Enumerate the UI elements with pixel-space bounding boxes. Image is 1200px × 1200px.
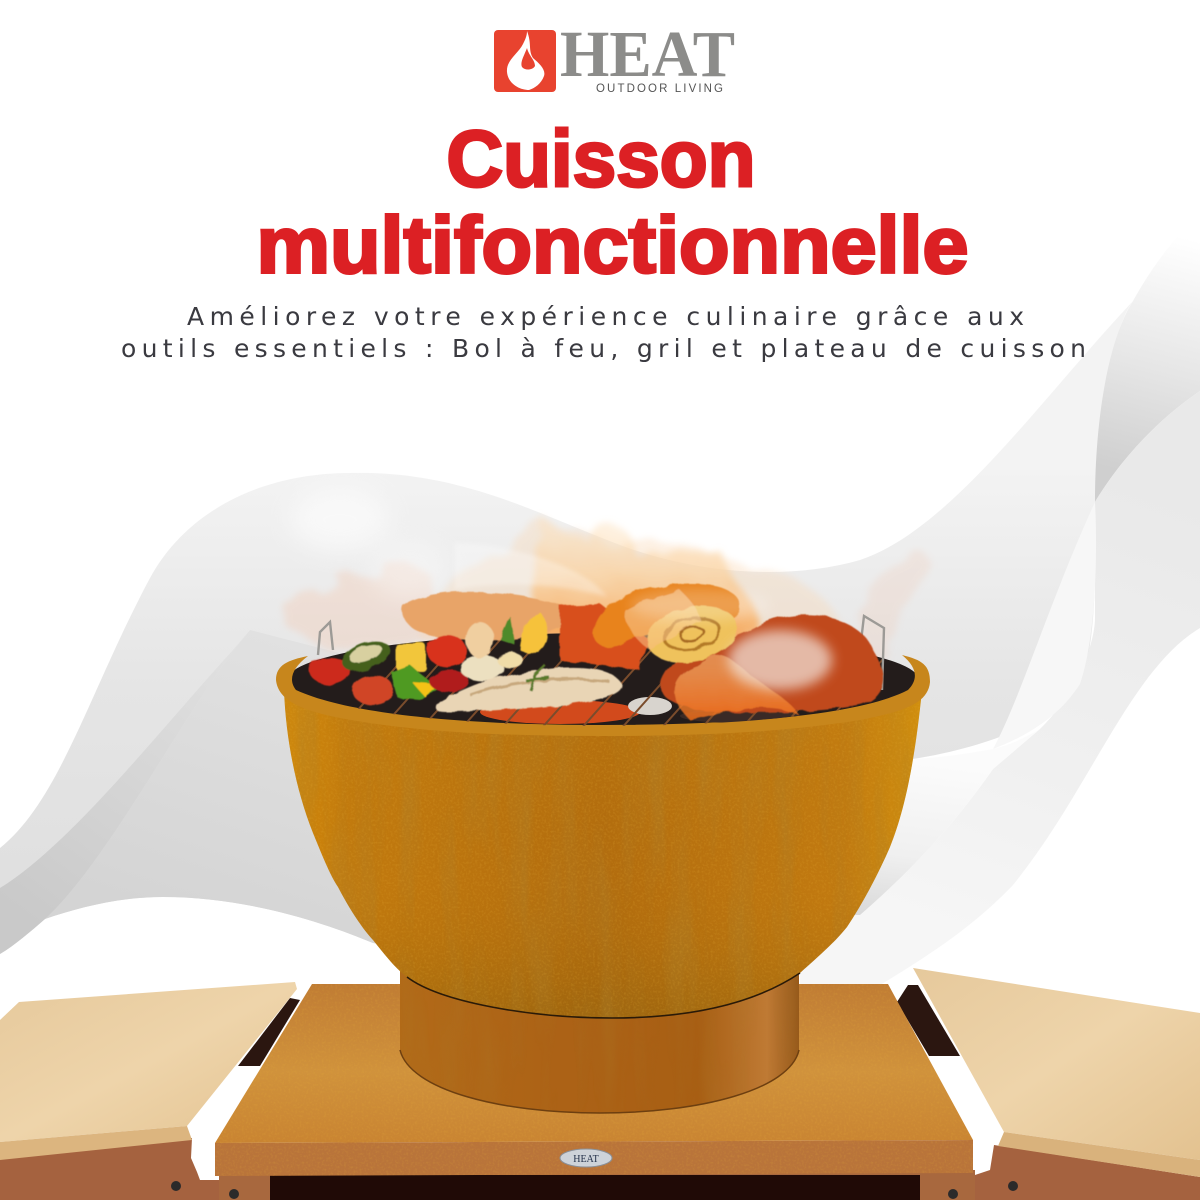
chicken breast	[435, 667, 622, 712]
coals and embers	[480, 697, 800, 724]
fire bowl	[276, 633, 930, 1020]
left shelf top	[0, 982, 297, 1142]
background swoosh	[0, 215, 1200, 985]
right shelf top	[913, 968, 1200, 1160]
vegetable skewers	[310, 612, 547, 705]
background flames and smoke	[283, 488, 931, 660]
left hinge	[238, 998, 300, 1066]
logo tagline: OUTDOOR LIVING	[596, 83, 723, 95]
bowl rim	[276, 655, 930, 736]
grill handles	[318, 616, 884, 690]
subtitle: Améliorez votre expérience culinaire grâce aux	[187, 302, 1024, 331]
bowl interior	[287, 633, 919, 727]
logo	[494, 18, 735, 95]
subtitle	[121, 302, 1086, 363]
bowl body	[284, 690, 922, 1018]
steak	[661, 615, 883, 713]
front smoke wisps	[455, 543, 770, 621]
logo icon: flame square	[494, 30, 556, 92]
table opening	[270, 1175, 920, 1200]
table base	[171, 984, 1018, 1200]
red meat back	[560, 604, 650, 670]
table badge: HEAT	[573, 1154, 599, 1165]
table front edge	[215, 1140, 973, 1176]
left wooden side shelf	[0, 982, 300, 1200]
flames on food	[625, 590, 800, 720]
title: multifonctionnelle	[256, 200, 968, 290]
grill bars	[358, 640, 882, 726]
onion	[641, 598, 743, 670]
cylindrical base	[400, 960, 800, 1115]
table badge	[560, 1149, 612, 1167]
food group	[310, 584, 883, 720]
right hinge	[897, 985, 960, 1056]
steam on steak	[728, 630, 832, 690]
grill and food	[310, 584, 900, 730]
right shelf front	[998, 1132, 1200, 1177]
left bracket	[0, 1138, 220, 1200]
table top	[215, 984, 973, 1143]
right bracket	[920, 1145, 1200, 1200]
screws	[171, 1181, 1018, 1199]
bowl seam shadow	[407, 973, 800, 1018]
salmon	[402, 592, 575, 641]
table legs	[219, 1170, 975, 1200]
title: Cuisson	[446, 114, 756, 203]
subtitle: outils essentiels : Bol à feu, gril et plateau de cuisson	[121, 334, 1086, 363]
logo wordmark: HEAT	[560, 18, 735, 91]
title	[256, 114, 968, 290]
left shelf front	[0, 1126, 192, 1160]
right wooden side shelf	[897, 968, 1200, 1200]
herbs	[525, 665, 550, 690]
sausages	[594, 584, 741, 647]
